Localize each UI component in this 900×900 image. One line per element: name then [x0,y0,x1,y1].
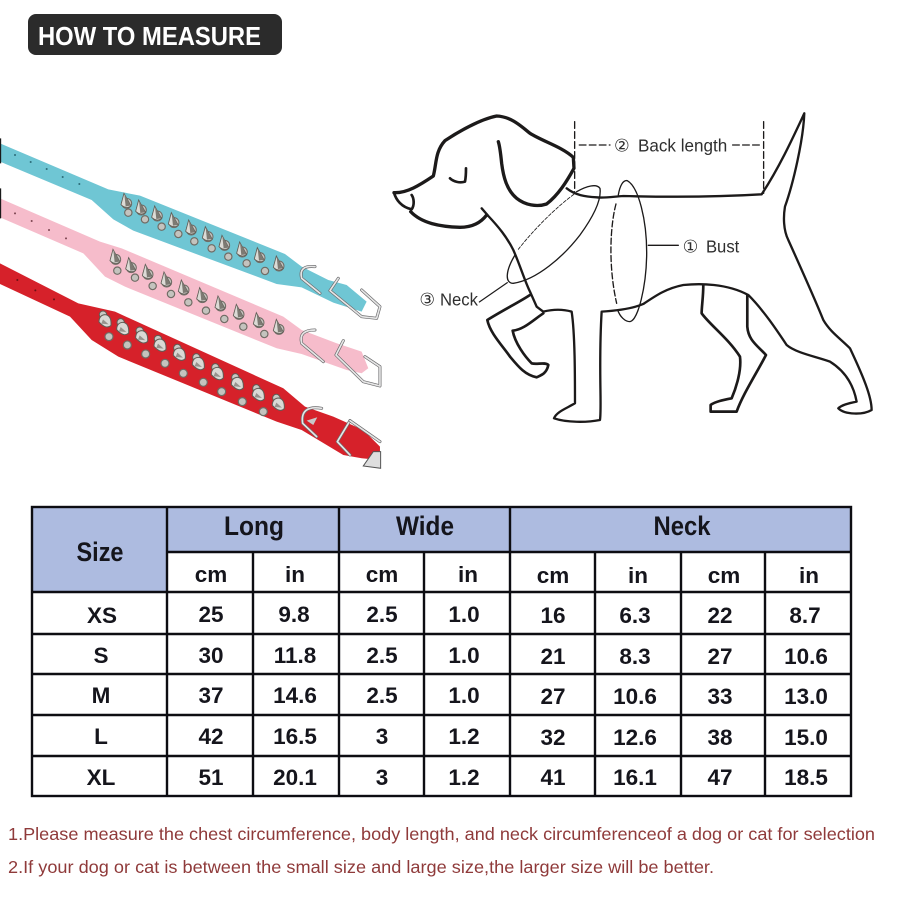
row L: 3 [376,724,388,749]
back length measure: ② [614,136,630,156]
row S: 2.5 [366,643,398,668]
edge marks [0,138,3,218]
dog outline [394,113,872,422]
row S: 1.0 [448,643,480,668]
table headers: in [799,563,819,588]
neck measure [419,186,600,309]
row M: 2.5 [366,683,398,708]
neck measure: Neck [440,289,478,309]
row M: 27 [540,684,566,709]
row M: 13.0 [784,684,828,709]
row XS: 9.8 [278,602,310,627]
row XS: XS [87,603,117,628]
footnotes [8,824,875,877]
footnotes: 1.Please measure the chest circumference, body length, and neck circumferenceof a dog or cat for selection [8,824,875,844]
table headers: Neck [654,511,711,541]
row S [93,643,828,669]
row XL: 16.1 [613,765,657,790]
row XL: 18.5 [784,765,828,790]
row XS: 6.3 [619,603,651,628]
size table [32,507,851,796]
row L: 12.6 [613,725,657,750]
row L: 15.0 [784,725,828,750]
row XL [87,765,828,790]
row M: 1.0 [448,683,480,708]
row M: 10.6 [613,684,657,709]
bust measure: Bust [706,236,739,256]
row XL: 47 [707,765,733,790]
row S: S [93,643,109,668]
red spiked collar [0,263,381,468]
table headers: cm [708,563,740,588]
row L [94,724,828,750]
table header fills [32,507,851,592]
row S: 11.8 [274,643,316,668]
table headers: Wide [396,511,454,541]
dog measuring diagram [394,113,872,422]
row L: 16.5 [273,724,317,749]
table headers: in [458,562,478,587]
row XL: 1.2 [448,765,480,790]
row S: 21 [540,644,566,669]
row XL: 41 [540,765,566,790]
row XL: 51 [198,765,224,790]
collars photo [0,138,381,468]
bust measure [611,181,739,322]
row S: 8.3 [619,644,651,669]
blue spiked collar [0,143,380,318]
table headers: Long [224,511,284,541]
row L: 1.2 [448,724,480,749]
row XS: 1.0 [448,602,480,627]
back length measure [575,122,764,193]
title badge: HOW TO MEASURE [38,21,261,51]
row XS [87,602,821,628]
table headers: in [285,562,305,587]
row XL: 3 [376,765,388,790]
bust measure: ① [683,236,698,256]
back length measure: Back length [638,135,727,155]
table headers: cm [366,562,398,587]
row XL: 20.1 [273,765,317,790]
row XS: 8.7 [789,603,821,628]
row L: 38 [707,725,733,750]
row M: 37 [198,683,224,708]
row M: M [92,683,110,708]
row L: L [94,724,108,749]
row M: 33 [707,684,733,709]
row S: 27 [707,644,733,669]
table headers [76,511,819,588]
row XS: 16 [540,603,566,628]
row S: 10.6 [784,644,828,669]
row S: 30 [198,643,224,668]
footnotes: 2.If your dog or cat is between the small size and large size,the larger size will be better. [8,857,714,877]
neck measure: ③ [419,289,435,309]
table headers: Size [76,537,124,567]
table headers: cm [537,563,569,588]
table grid [32,507,851,796]
pink spiked collar [0,198,380,386]
table headers: cm [195,562,227,587]
row XS: 25 [198,602,224,627]
table headers: in [628,563,648,588]
row L: 32 [540,725,566,750]
row M: 14.6 [273,683,317,708]
row M [92,683,828,709]
row XS: 22 [707,603,733,628]
row L: 42 [198,724,224,749]
row XL: XL [87,765,116,790]
row XS: 2.5 [366,602,398,627]
